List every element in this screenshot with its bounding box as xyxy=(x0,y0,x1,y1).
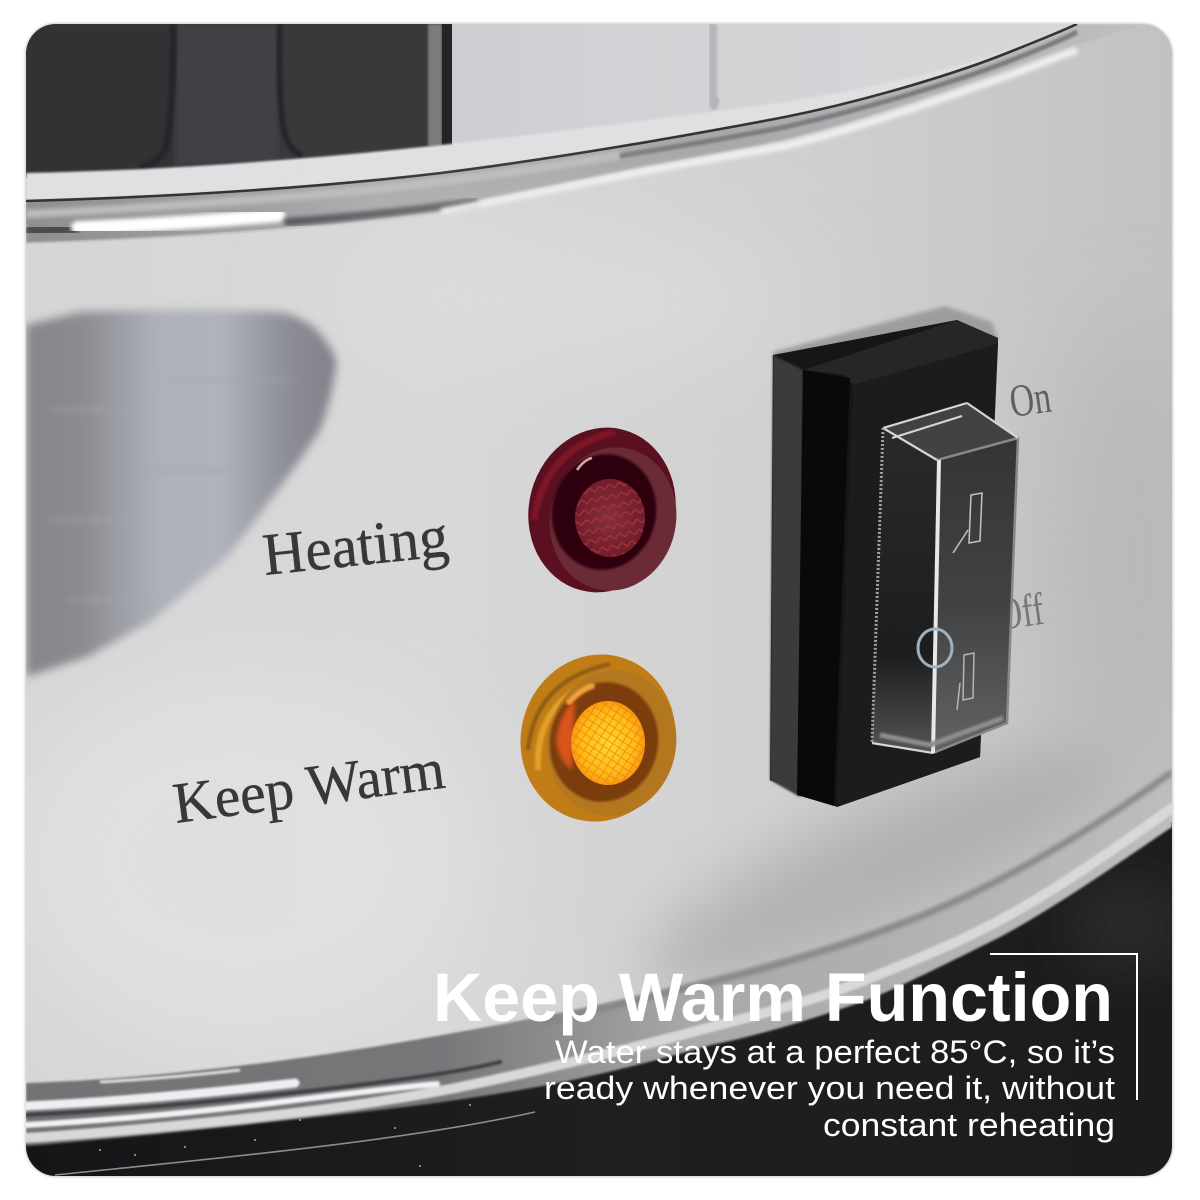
label: Heating: Heating xyxy=(259,503,451,588)
lower body shading xyxy=(637,742,1104,990)
heating indicator light xyxy=(528,427,676,592)
switch shadow channel xyxy=(797,370,850,806)
switch left plate xyxy=(770,355,803,797)
title: Keep Warm Function xyxy=(433,959,1113,1036)
label: Off: Off xyxy=(994,583,1047,640)
dark inner wall xyxy=(26,24,452,178)
reflection brushed streaks xyxy=(50,380,290,600)
base glow xyxy=(1084,886,1172,964)
switch top bevel xyxy=(803,320,998,385)
description: ready whenever you need it, without xyxy=(544,1070,1115,1106)
lower chrome streaks xyxy=(26,808,1172,1138)
ledge thin light edge xyxy=(100,1070,240,1082)
rocker switch xyxy=(770,306,1018,807)
frame accent xyxy=(990,954,1137,1100)
upper rim light band xyxy=(26,50,1010,200)
left lower body highlight xyxy=(58,725,396,996)
base thin reflection line xyxy=(55,1112,535,1175)
ledge groove xyxy=(540,772,1172,1024)
switch front face xyxy=(837,344,998,807)
label: Keep Warm: Keep Warm xyxy=(169,736,448,836)
base dust xyxy=(99,1104,471,1167)
on symbol xyxy=(953,493,982,553)
dark reflection on steel xyxy=(26,310,336,677)
switch back shadow xyxy=(773,306,998,365)
upper rim dark line xyxy=(26,24,1077,201)
top body highlight xyxy=(322,162,527,222)
label: On: On xyxy=(1006,371,1054,427)
clear cover xyxy=(872,403,1018,753)
description xyxy=(544,1034,1115,1143)
switch housing xyxy=(770,320,998,807)
keep warm indicator light xyxy=(520,654,676,822)
black base xyxy=(26,822,1172,1176)
description: Water stays at a perfect 85°C, so it’s xyxy=(555,1034,1115,1070)
off symbol xyxy=(918,629,952,667)
chrome bead xyxy=(26,24,1150,243)
lower steel ledge xyxy=(26,822,1172,1148)
urn interior xyxy=(26,24,1172,224)
description: constant reheating xyxy=(823,1107,1115,1143)
right body shading xyxy=(1064,392,1172,728)
